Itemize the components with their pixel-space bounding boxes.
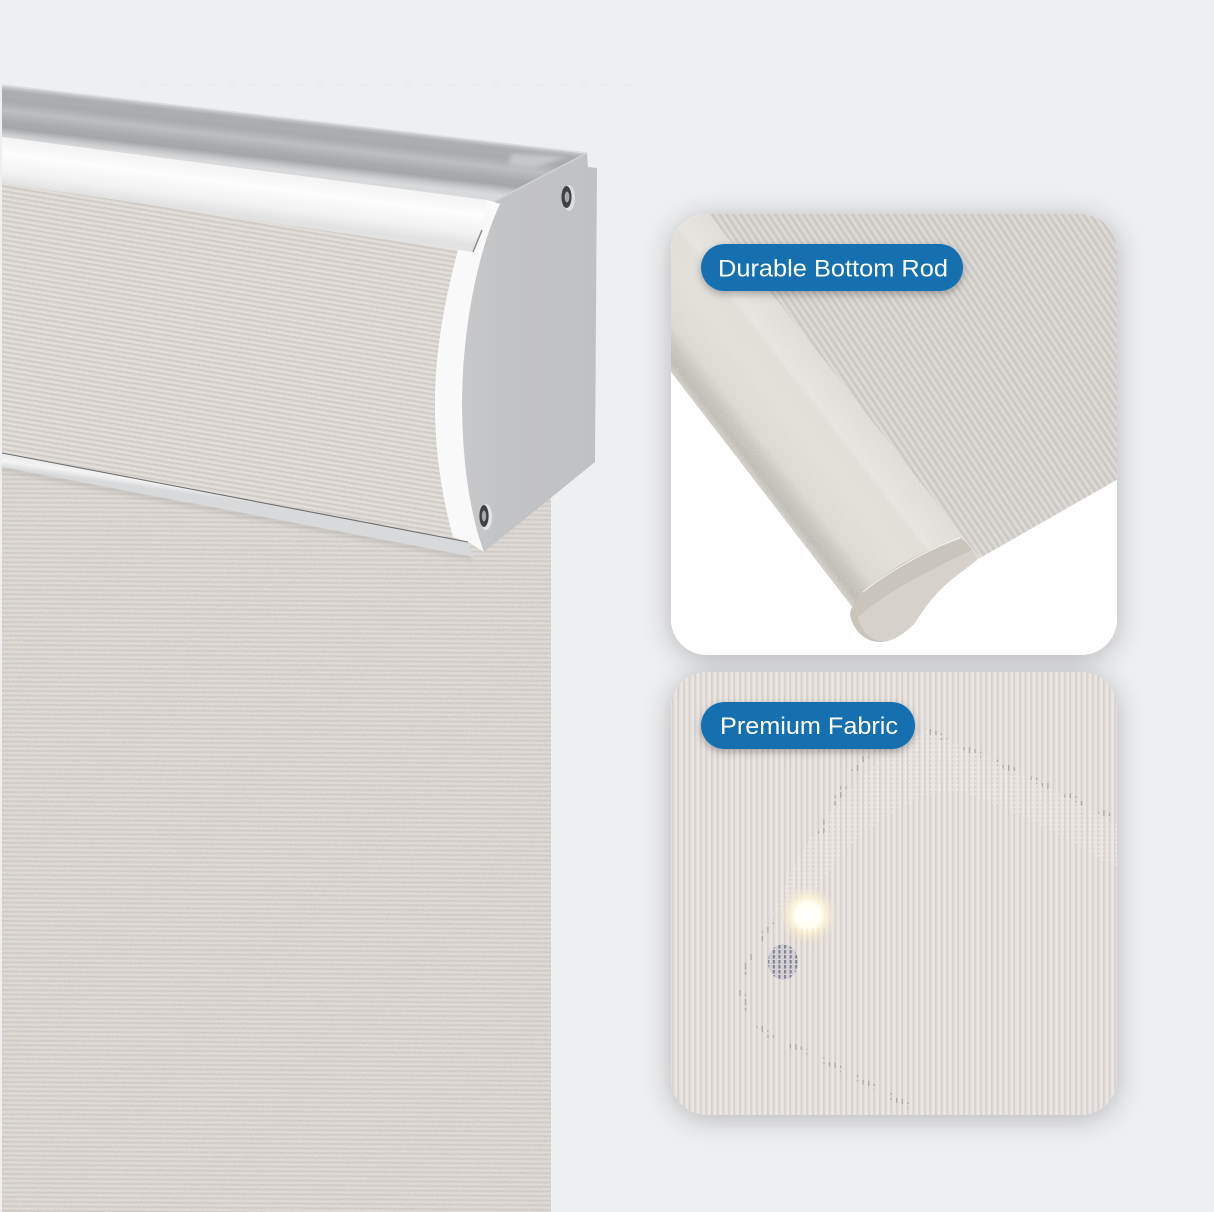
top screw bbox=[562, 185, 575, 211]
label pill: premium fabric: Premium Fabric bbox=[720, 713, 898, 740]
fabric swatch bbox=[700, 205, 1120, 558]
fabric photo bbox=[671, 672, 1117, 1115]
light dotted arc through the fabric bbox=[772, 730, 1117, 915]
headrail end cap bbox=[462, 153, 597, 552]
rod end cap bbox=[850, 538, 977, 642]
panel: premium fabric bbox=[671, 672, 1117, 1115]
panel: roller shade product photo bbox=[2, 85, 597, 1212]
light glare bbox=[784, 889, 832, 946]
card shadow bbox=[671, 214, 1117, 655]
white fascia band bbox=[2, 137, 500, 252]
dark arc ticks bbox=[740, 730, 1113, 1112]
bottom lip of the valance bbox=[2, 453, 474, 558]
label pill: durable bottom rod: Durable Bottom Rod bbox=[718, 256, 948, 282]
bottom screw bbox=[479, 504, 492, 530]
label pill: premium fabric bbox=[701, 702, 915, 749]
white curved trim bbox=[435, 200, 500, 552]
panel: durable bottom rod bbox=[671, 205, 1120, 655]
label pill: durable bottom rod bbox=[701, 244, 963, 291]
headrail top channel bbox=[2, 85, 587, 202]
rod photo bbox=[671, 205, 1120, 655]
dark spot bbox=[768, 944, 798, 980]
card shadow bbox=[671, 672, 1117, 1115]
band notch shadow bbox=[473, 230, 482, 252]
fabric valance bbox=[2, 183, 462, 543]
hanging fabric bbox=[2, 460, 551, 1212]
rod body bbox=[671, 210, 981, 610]
